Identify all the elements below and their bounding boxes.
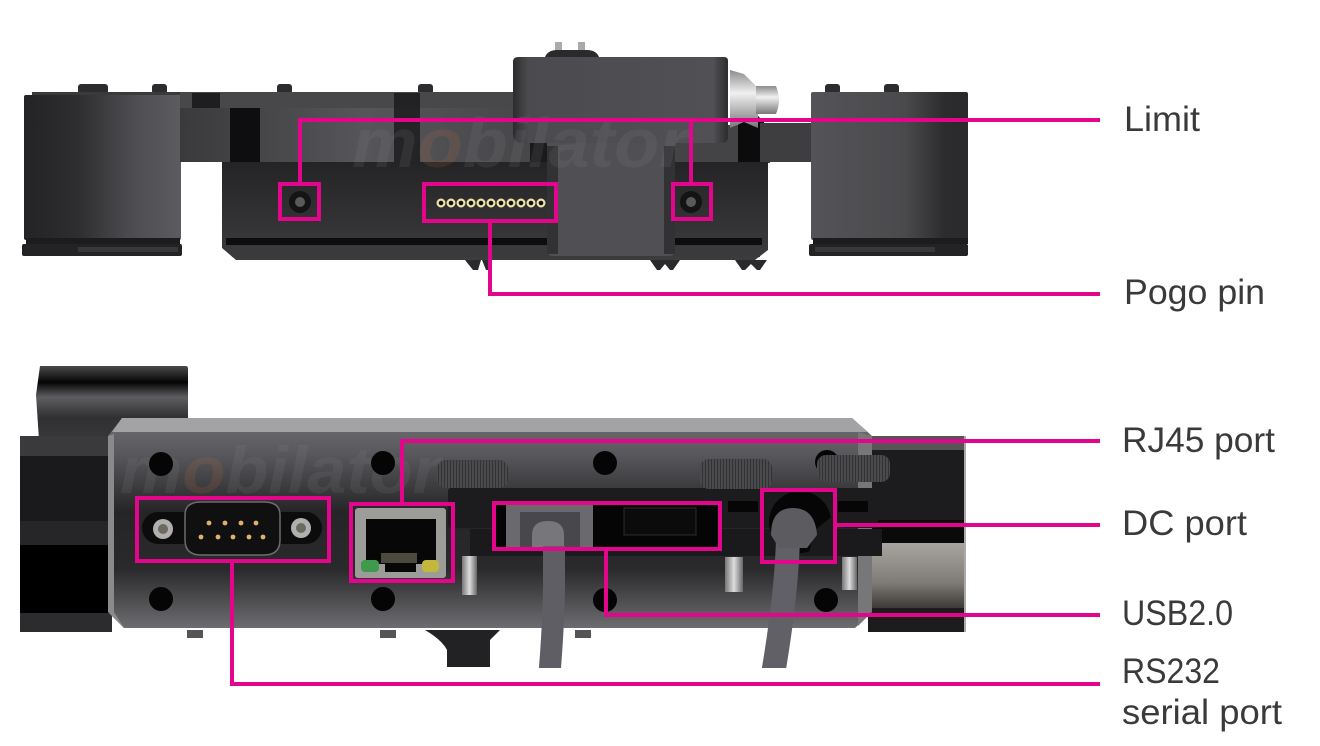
lower post xyxy=(425,630,500,667)
limit pin left xyxy=(289,191,311,213)
label: RS232 serial port: serial port xyxy=(1122,693,1282,732)
label: RS232 serial port xyxy=(1122,652,1282,732)
watermark: mobilator xyxy=(120,433,444,507)
label: Pogo pin: Pogo pin xyxy=(1124,273,1265,312)
callout: limit xyxy=(280,120,1100,219)
centre housing xyxy=(513,42,728,256)
DC plug and cable xyxy=(769,491,835,680)
USB cable xyxy=(549,546,554,680)
lower body xyxy=(222,162,768,260)
left rail xyxy=(20,436,112,632)
bottom feet xyxy=(465,260,767,270)
right rail xyxy=(868,436,966,632)
top mounting bumps xyxy=(78,84,433,94)
RJ45 socket xyxy=(355,508,446,578)
callout: RJ45 xyxy=(351,441,1100,581)
label: RJ45 port: RJ45 port xyxy=(1122,421,1275,460)
small tabs xyxy=(187,630,591,638)
rear bracket xyxy=(36,366,188,440)
bridge xyxy=(180,92,550,162)
callout lines and highlight boxes xyxy=(137,120,1100,684)
callout: RS232 xyxy=(137,498,1100,684)
right bridge xyxy=(675,114,812,163)
metal fitting xyxy=(730,70,779,128)
callout: USB xyxy=(494,503,1100,615)
clamp bar xyxy=(448,488,882,556)
DB9 serial connector xyxy=(142,502,322,555)
screw holes xyxy=(149,450,839,612)
thumb knobs xyxy=(437,455,890,489)
label: RS232 serial port: RS232 xyxy=(1122,652,1220,691)
threaded screws xyxy=(462,556,857,595)
left cylinder xyxy=(22,92,182,256)
pogo pins xyxy=(438,200,544,206)
label: USB2.0: USB2.0 xyxy=(1122,594,1233,633)
label: DC port: DC port xyxy=(1122,504,1247,543)
right cylinder xyxy=(809,84,968,256)
callout: DC xyxy=(762,490,1100,562)
USB opening with plug xyxy=(493,502,720,548)
label: Limit: Limit xyxy=(1124,100,1200,139)
watermark: mobilator xyxy=(352,104,692,182)
top device: dock bottom view xyxy=(22,42,968,270)
bottom device: port side xyxy=(20,366,966,680)
callout: pogo pin xyxy=(424,184,1100,294)
main body xyxy=(108,418,872,628)
limit pin right xyxy=(680,191,702,213)
